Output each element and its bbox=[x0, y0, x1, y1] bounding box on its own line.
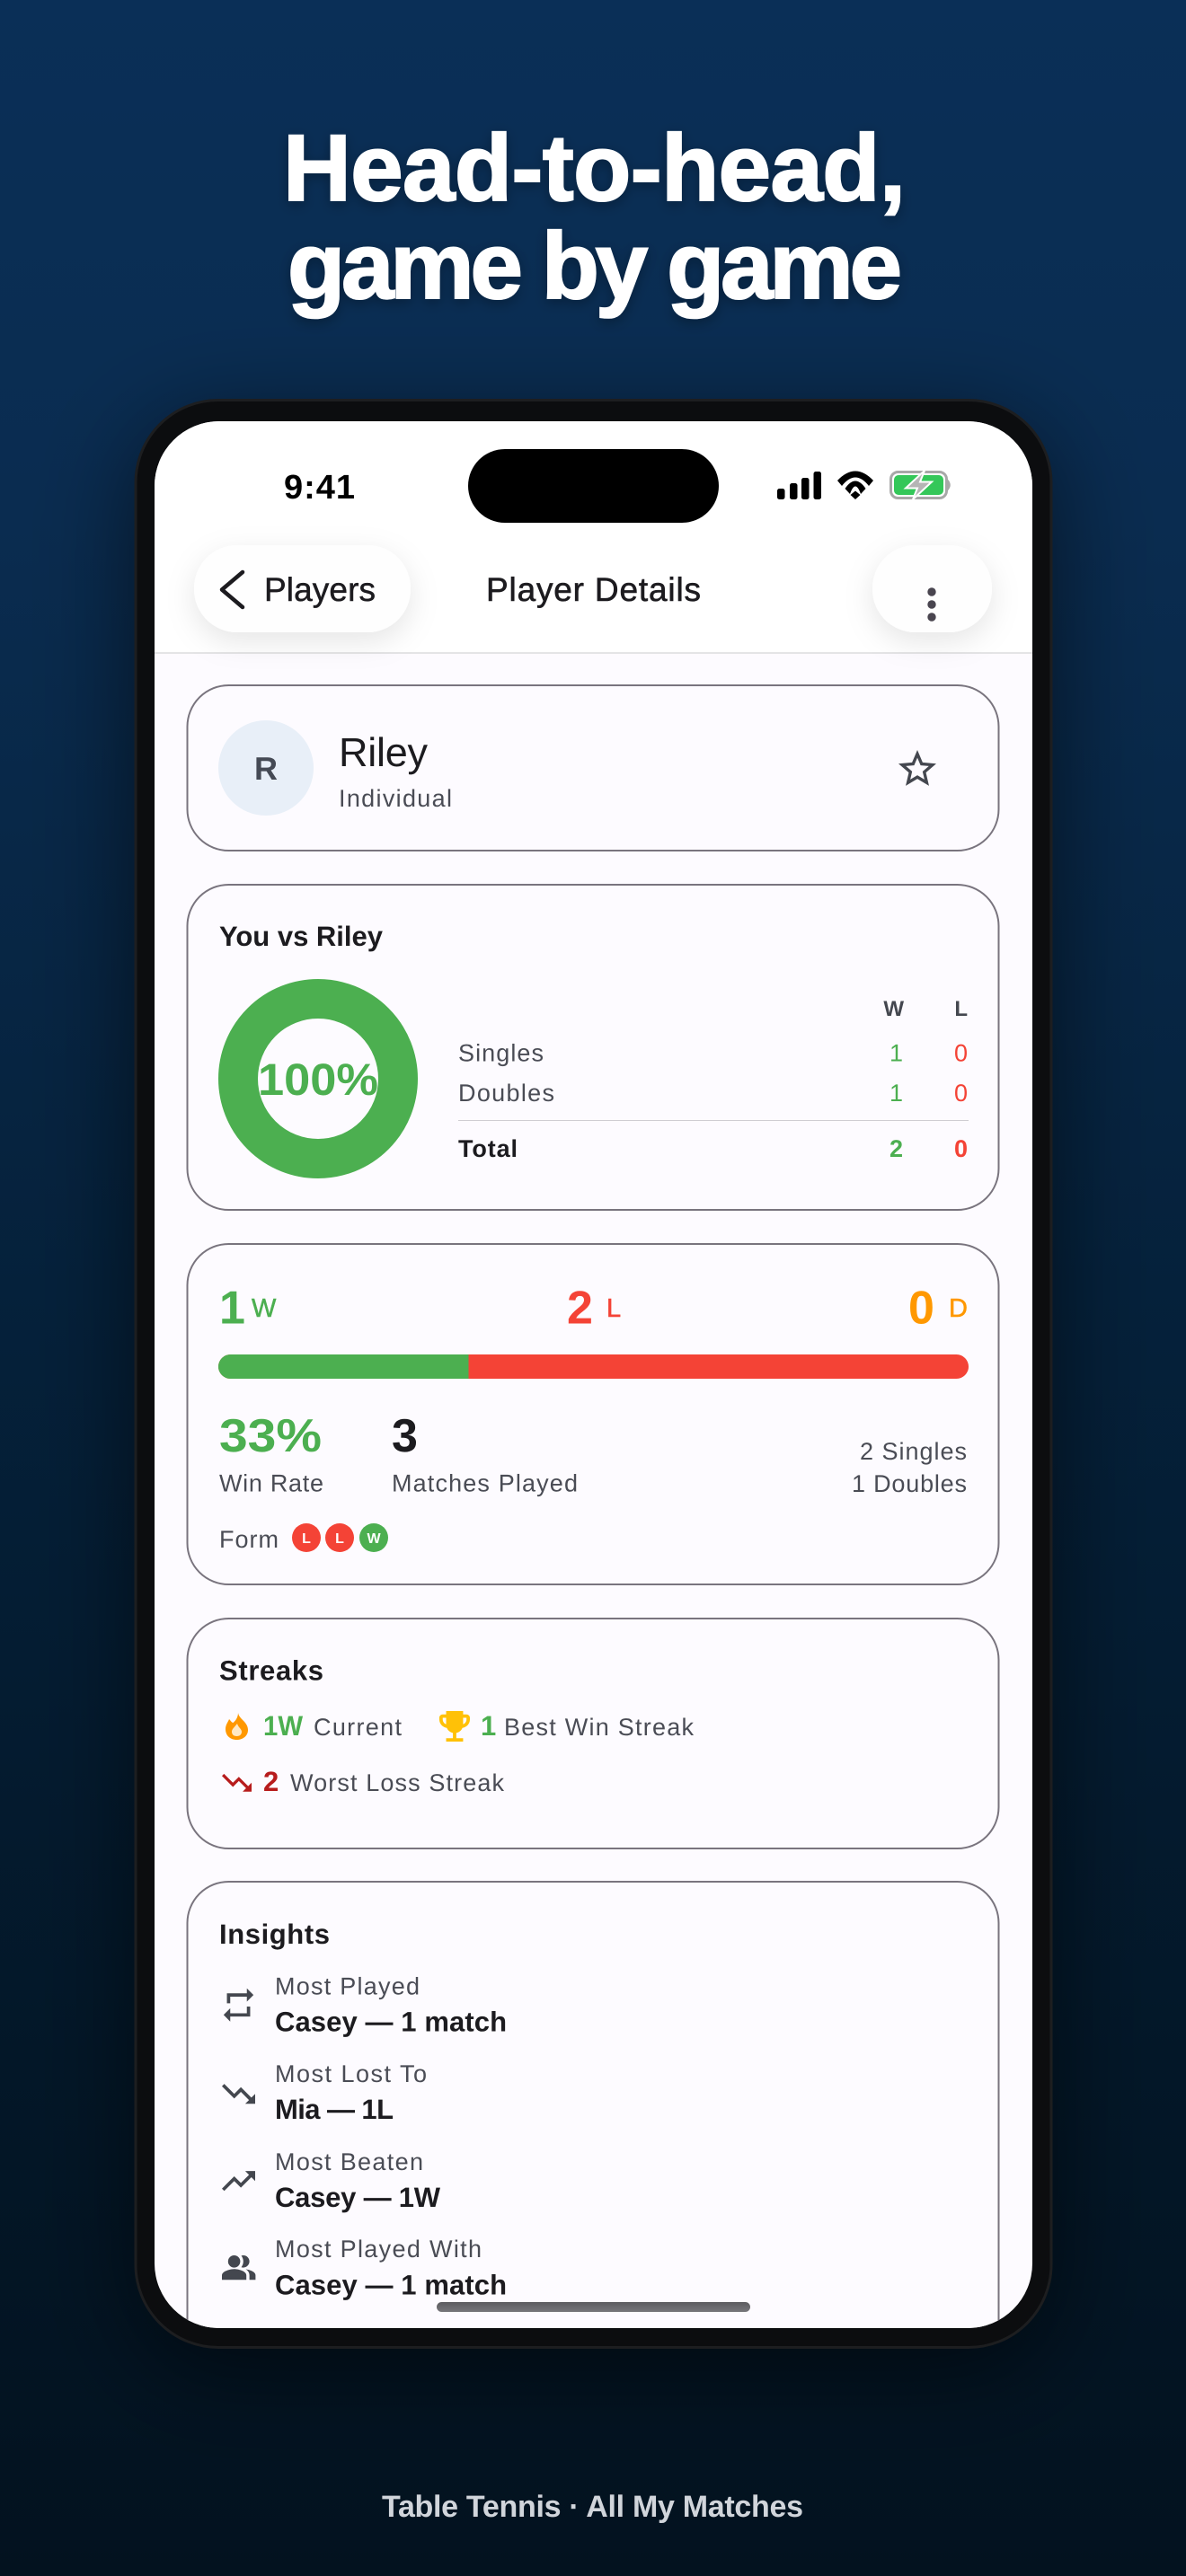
insight: most beaten: Most Beaten bbox=[275, 2148, 423, 2175]
panel heading: You vs Riley bbox=[219, 921, 384, 952]
best win streak bbox=[439, 1710, 694, 1742]
draws count bbox=[908, 1283, 968, 1335]
header bar bbox=[155, 421, 1032, 654]
record table: 0 bbox=[954, 1080, 968, 1107]
win rate bbox=[219, 1410, 323, 1496]
form badges: W bbox=[367, 1531, 381, 1547]
more menu button bbox=[872, 545, 992, 632]
worst loss streak bbox=[222, 1766, 505, 1797]
match type split bbox=[852, 1438, 967, 1497]
player name: Riley bbox=[339, 729, 428, 775]
icon: star bbox=[898, 750, 936, 786]
insight: most lost to: Mia — 1L bbox=[275, 2094, 394, 2125]
form badges bbox=[219, 1523, 388, 1553]
icon: flame bbox=[226, 1713, 248, 1740]
status time: 9:41 bbox=[284, 469, 355, 507]
donut chart bbox=[238, 999, 398, 1159]
match type split: 1 Doubles bbox=[852, 1470, 967, 1497]
insight: most lost to: Most Lost To bbox=[275, 2060, 427, 2087]
record table: 0 bbox=[954, 1135, 968, 1162]
phone screen bbox=[155, 421, 1032, 2510]
icon: trending down red bbox=[222, 1774, 252, 1792]
player type: Individual bbox=[339, 785, 452, 812]
avatar bbox=[218, 720, 314, 816]
record table: Singles bbox=[458, 1040, 544, 1067]
win rate: Win Rate bbox=[219, 1469, 323, 1496]
donut chart: 100% bbox=[258, 1054, 378, 1105]
form badges: L bbox=[302, 1531, 311, 1547]
dynamic island bbox=[468, 449, 719, 523]
home indicator bbox=[437, 2302, 750, 2312]
icon: trending up bbox=[222, 2171, 255, 2191]
icon: wifi bbox=[837, 471, 873, 499]
record table: Doubles bbox=[458, 1080, 554, 1107]
phone mockup bbox=[136, 401, 1051, 2510]
draws count: 0 bbox=[908, 1283, 934, 1335]
title bbox=[283, 116, 906, 319]
panel heading: Streaks bbox=[219, 1654, 323, 1687]
insight: most played with: Most Played With bbox=[275, 2236, 482, 2263]
insight: most beaten bbox=[222, 2148, 441, 2213]
record table bbox=[458, 997, 969, 1162]
insight: most beaten: Casey — 1W bbox=[275, 2182, 441, 2213]
form badges: Form bbox=[219, 1526, 279, 1553]
icon: repeat bbox=[224, 1989, 253, 2022]
panel: overall record bbox=[187, 1244, 999, 1584]
title: Head-to-head, bbox=[283, 116, 906, 221]
losses count: L bbox=[606, 1294, 621, 1323]
avatar: R bbox=[254, 750, 278, 787]
back button bbox=[194, 545, 411, 632]
phone shadow bbox=[135, 422, 1051, 2371]
losses count: 2 bbox=[567, 1283, 593, 1335]
footer caption: Table Tennis · All My Matches bbox=[382, 2490, 803, 2524]
win loss bar bbox=[218, 1354, 969, 1379]
wins count: W bbox=[252, 1294, 277, 1323]
insight: most played with bbox=[222, 2236, 507, 2301]
icon: battery charging bbox=[891, 471, 950, 499]
screen heading: Player Details bbox=[486, 571, 701, 608]
panel heading: Insights bbox=[219, 1919, 330, 1950]
best win streak: Best Win Streak bbox=[504, 1714, 694, 1741]
icon: signal bbox=[777, 472, 821, 499]
win rate: 33% bbox=[219, 1410, 322, 1462]
insight: most played: Casey — 1 match bbox=[275, 2007, 507, 2037]
record table: 2 bbox=[890, 1135, 903, 1162]
record table: Total bbox=[458, 1135, 518, 1162]
record table: 0 bbox=[954, 1040, 968, 1067]
matches played: 3 bbox=[392, 1410, 418, 1462]
current streak: Current bbox=[314, 1714, 402, 1741]
icon: trending down bbox=[222, 2084, 255, 2104]
best win streak: 1 bbox=[481, 1710, 496, 1742]
record table: L bbox=[954, 997, 968, 1021]
wins count bbox=[219, 1283, 277, 1335]
phone frame bbox=[136, 401, 1051, 2348]
panel: you vs riley bbox=[187, 885, 999, 1210]
panel: insights bbox=[187, 1882, 999, 2510]
insight: most lost to bbox=[222, 2060, 427, 2125]
wins count: 1 bbox=[219, 1283, 245, 1335]
match type split: 2 Singles bbox=[860, 1438, 967, 1465]
current streak bbox=[226, 1710, 402, 1742]
worst loss streak: Worst Loss Streak bbox=[290, 1769, 505, 1796]
screen background bbox=[155, 421, 1032, 2328]
icon: people bbox=[222, 2255, 255, 2280]
icon: trophy bbox=[439, 1711, 470, 1742]
panel: streaks bbox=[187, 1619, 999, 1848]
panel: player card bbox=[187, 685, 999, 851]
title: game by game bbox=[288, 214, 902, 319]
matches played: Matches Played bbox=[392, 1469, 578, 1496]
back label: Players bbox=[264, 571, 376, 608]
losses count bbox=[567, 1283, 621, 1335]
record table: 1 bbox=[890, 1040, 903, 1067]
current streak: 1W bbox=[263, 1710, 304, 1742]
icon: chevron back bbox=[222, 572, 243, 607]
record table: W bbox=[883, 997, 904, 1021]
draws count: D bbox=[949, 1294, 968, 1323]
record table: 1 bbox=[890, 1080, 903, 1107]
insight: most played: Most Played bbox=[275, 1972, 420, 1999]
matches played bbox=[392, 1410, 578, 1496]
insight: most played with: Casey — 1 match bbox=[275, 2269, 507, 2301]
form badges: L bbox=[335, 1531, 344, 1547]
insight: most played bbox=[224, 1972, 507, 2037]
worst loss streak: 2 bbox=[263, 1766, 279, 1797]
